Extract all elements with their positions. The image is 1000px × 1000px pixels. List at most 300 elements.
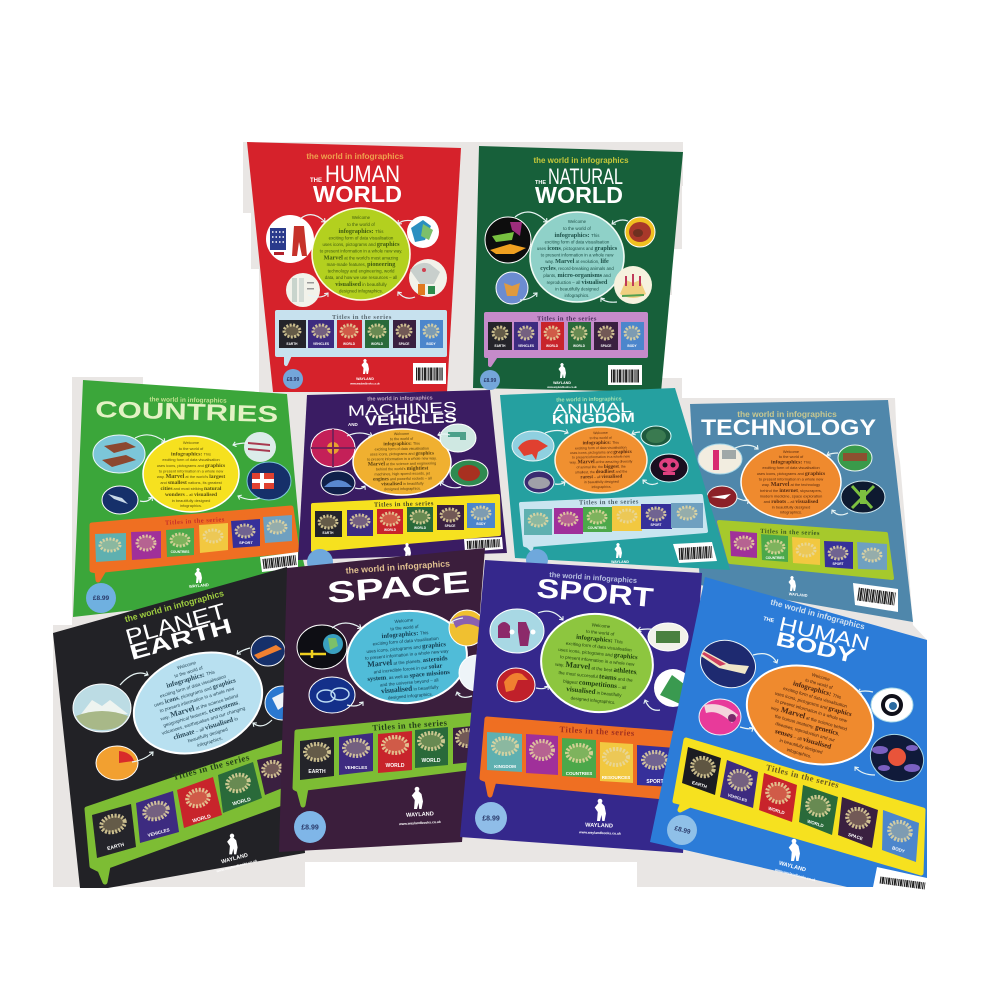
welcome text: to the world of [179, 446, 204, 451]
welcome text: infographics: This [339, 228, 383, 235]
welcome text: man-made features, pioneering [327, 261, 395, 268]
welcome text: to the world of [590, 436, 612, 440]
welcome text: uses icons, pictograms and graphics [774, 691, 852, 718]
series thumbnails: VEHICLES [345, 765, 367, 770]
series thumbnails: COUNTRIES [588, 526, 606, 530]
welcome text: Marvel at the science and engineering [368, 461, 436, 468]
title [123, 598, 235, 665]
publisher logo [189, 568, 209, 589]
welcome circle [312, 208, 410, 300]
welcome text: cycles, record-breaking animals and [540, 265, 614, 272]
title: THE [763, 616, 775, 624]
welcome text: in beautifully designed [584, 480, 619, 484]
series thumbnails: COUNTRIES [766, 556, 784, 560]
publisher logo [547, 363, 577, 389]
icon: city and chimney [409, 259, 447, 297]
welcome text: and the universe beyond – all [380, 677, 439, 687]
title: BODY [774, 628, 858, 668]
welcome text: to the world of [390, 624, 419, 631]
welcome text: uses icons, pictograms and graphics [558, 647, 638, 661]
book: The Natural World [473, 146, 683, 392]
price badge [475, 802, 507, 834]
barcode [853, 583, 898, 612]
welcome text: infographics. [180, 503, 202, 508]
welcome text: infographics. [786, 747, 812, 759]
series panel [92, 508, 297, 580]
publisher logo [788, 576, 808, 598]
icon: scales [641, 426, 671, 446]
icon: aircraft [707, 486, 737, 508]
icon: wheel [311, 429, 355, 467]
series thumbnails [92, 753, 285, 858]
icon: orange pie [96, 746, 138, 780]
welcome text: uses icons, pictograms and graphics [537, 245, 617, 252]
icon: skull [650, 454, 688, 482]
welcome text: visualised in beautifully [566, 685, 622, 698]
series thumbnails: WORLD [232, 797, 252, 807]
title: THE [310, 178, 322, 184]
icon: ocean scene [251, 636, 285, 666]
welcome text: cities and most striking natural [161, 486, 221, 492]
icon: buildings [286, 273, 320, 307]
publisher logo [404, 543, 411, 558]
price badge: £8.99 [482, 816, 500, 822]
icon: islands [102, 486, 138, 514]
welcome text: way. Marvel at the amazing diversity [570, 459, 632, 465]
welcome text: infographics: This [171, 452, 211, 458]
title [310, 161, 402, 207]
welcome text: diseases, reproduction and our [775, 721, 836, 743]
welcome text: Welcome [183, 440, 199, 445]
welcome text: geographical features, ecosystems, [163, 699, 240, 728]
icon: scoreboard [648, 623, 688, 651]
price badge [307, 549, 333, 575]
icon: planet layers [449, 610, 485, 646]
series thumbnails: WORLD [768, 806, 786, 816]
book: Planet Earth [53, 567, 305, 888]
series heading: Titles in the series [559, 724, 635, 738]
tagline: the world in infographics [306, 152, 404, 161]
title [552, 399, 635, 427]
series thumbnails: SPACE [601, 344, 611, 348]
icon: map [407, 216, 439, 248]
welcome text: modern medicine, space exploration [760, 494, 822, 498]
price badge: £8.99 [484, 378, 496, 384]
series thumbnails: VEHICLES [147, 827, 170, 838]
series thumbnails: BODY [627, 344, 637, 348]
welcome text: Welcome [811, 672, 831, 682]
title: SPORT [535, 573, 655, 613]
series thumbnails: WORLD [414, 526, 427, 530]
welcome text: way. Marvel at evolution, life [545, 258, 609, 265]
icon: pipe [440, 424, 476, 452]
book: Sport [460, 560, 702, 853]
series panel [313, 496, 499, 553]
welcome text: to present information in a whole new [159, 686, 235, 713]
welcome text: uses icons, pictograms and graphics [570, 450, 632, 455]
welcome text: infographics: This [583, 441, 619, 446]
series thumbnails: BODY [891, 845, 905, 854]
publisher logo: WAYLAND [553, 381, 571, 385]
icon: figure and grid [698, 444, 742, 474]
publisher logo: WAYLAND [778, 861, 806, 874]
series thumbnails [315, 503, 495, 537]
publisher logo: WAYLAND [585, 823, 613, 829]
publisher logo: www.waylandbooks.co.uk [350, 382, 380, 386]
series thumbnails: VEHICLES [518, 344, 534, 348]
series thumbnails: WORLD [422, 758, 441, 764]
icon: globe [265, 686, 299, 720]
series thumbnails [487, 732, 675, 787]
publisher logo [398, 787, 441, 826]
welcome text: rarest – all visualised [580, 475, 622, 480]
tagline: the world in infographics [556, 396, 622, 404]
icon: earth and orbit [297, 625, 347, 669]
icon: blood cell [864, 727, 930, 789]
welcome text: to the world of [586, 629, 615, 637]
arrows [536, 611, 660, 710]
welcome text: beautifully designed [187, 726, 229, 743]
title [348, 399, 457, 428]
welcome text: data, and how we use resources – all [325, 275, 397, 280]
welcome text: Welcome [176, 660, 197, 670]
series thumbnails: WORLD [192, 814, 212, 824]
arrows [735, 445, 848, 515]
welcome text: climate – all visualised in [172, 716, 239, 742]
series thumbnails: WORLD [384, 528, 397, 532]
welcome text: Welcome [591, 622, 611, 629]
cover [460, 560, 702, 853]
publisher logo: www.waylandbooks.co.uk [547, 386, 577, 389]
welcome text: to the world of [805, 677, 834, 690]
icon: hands [496, 272, 528, 304]
series thumbnails: WORLD [343, 342, 356, 346]
welcome text: engines and powerful rockets – all [373, 476, 432, 483]
welcome text: exciting form of data visualisation [159, 674, 227, 699]
cover [298, 390, 507, 560]
welcome text: way. Marvel at the best athletes, [555, 660, 638, 676]
series thumbnails: COUNTRIES [566, 771, 592, 776]
title: HUMAN [777, 613, 871, 656]
series thumbnails [95, 515, 292, 562]
tagline: the world in infographics [769, 598, 866, 632]
welcome text: visualised in beautifully [335, 281, 387, 288]
price badge: £8.99 [674, 825, 691, 836]
tagline: the world in infographics [549, 570, 637, 585]
welcome circle [535, 607, 659, 719]
welcome text: senses – all visualised [774, 727, 832, 751]
icon: muscle [694, 633, 762, 695]
price badge [480, 370, 500, 390]
welcome text: volcanoes, earthquakes and our changing [161, 705, 246, 736]
series panel [675, 740, 923, 873]
welcome text: and incredible forces in our solar [373, 662, 443, 674]
arrows [515, 212, 628, 302]
welcome text: Marvel at the planets, asteroids [367, 655, 448, 669]
welcome text: of animal life: the biggest, the [576, 465, 626, 470]
welcome text: uses icons, pictograms and graphics [322, 241, 400, 248]
welcome text: to the world of [390, 437, 414, 441]
welcome text: machines, high-speed records, jet [375, 472, 430, 476]
tagline: the world in infographics [345, 558, 450, 576]
welcome text: to the world of [779, 454, 804, 459]
price badge: £8.99 [301, 824, 319, 832]
book: The Human World [247, 142, 461, 392]
series heading: Titles in the series [537, 316, 597, 322]
welcome text: to present information in a whole new [775, 698, 848, 724]
welcome text: infographics: This [165, 669, 215, 690]
series thumbnails: SPACE [445, 524, 455, 528]
welcome text: infographics: This [576, 634, 623, 645]
series panel [482, 719, 680, 798]
series thumbnails: BODY [426, 342, 436, 346]
barcode [873, 867, 927, 887]
welcome text: and robots – all visualised [764, 499, 818, 505]
welcome circle [733, 649, 887, 781]
barcode [413, 363, 446, 384]
welcome text: to present information in a whole new [572, 454, 630, 460]
series panel [87, 740, 290, 882]
welcome text: way. Marvel at the technology [762, 482, 820, 488]
title: KINGDOM [552, 410, 635, 427]
title: MACHINES [348, 399, 457, 420]
welcome text: biggest competitions – all [563, 678, 627, 690]
welcome text: exciting form of data visualisation [545, 240, 610, 244]
price badge [86, 583, 116, 613]
welcome text: designed infographics. [384, 487, 421, 491]
icon: flag badge [247, 462, 291, 500]
welcome text: way. Marvel at the science behind [770, 705, 848, 732]
book: Animal Kingdom [500, 388, 730, 571]
tagline: the world in infographics [149, 396, 227, 405]
series panel [277, 312, 445, 364]
welcome text: in beautifully designed [172, 498, 210, 503]
barcode [673, 542, 717, 563]
welcome text: exciting form of data visualisation [565, 641, 632, 653]
publisher logo: WAYLAND [356, 377, 374, 381]
welcome text: uses icons, pictograms and graphics [153, 677, 237, 708]
welcome text: to present information in a whole new [541, 252, 614, 258]
book: The Human Body [650, 577, 930, 887]
series heading: Titles in the series [765, 762, 841, 790]
series thumbnails: COUNTRIES [171, 550, 189, 554]
icon: white planet [459, 655, 495, 691]
series thumbnails: WORLD [386, 763, 405, 769]
welcome text: designed infographics. [388, 691, 433, 700]
icon: cell [625, 217, 655, 247]
welcome text: infographics: This [383, 442, 420, 447]
title: AND [348, 422, 358, 427]
welcome text: Welcome [783, 449, 799, 454]
cover [690, 400, 913, 622]
series heading: Titles in the series [165, 516, 225, 527]
series thumbnails: SPACE [847, 832, 863, 841]
welcome text: uses icons, pictograms and graphics [757, 471, 825, 477]
welcome text: the human anatomy, genetics, [774, 713, 840, 737]
publisher logo [611, 543, 629, 564]
title: ANIMAL [553, 399, 632, 417]
cover [73, 380, 310, 617]
series panel [719, 522, 892, 578]
tagline: the world in infographics [737, 409, 837, 419]
arrows [332, 618, 472, 706]
cover [650, 577, 927, 887]
icon: players [490, 609, 544, 653]
series thumbnails: EARTH [691, 780, 708, 789]
publisher logo: www.waylandbooks.co.uk [774, 867, 816, 882]
arrows [135, 435, 260, 502]
welcome text: smallest, the deadliest and the [575, 470, 627, 475]
welcome text: to present information in a whole new way [365, 648, 449, 661]
icon: whale [524, 471, 554, 493]
publisher logo: WAYLAND [221, 853, 249, 865]
welcome text: to present information in a whole new [560, 654, 635, 667]
publisher logo [215, 834, 258, 874]
series thumbnails: BODY [476, 522, 486, 526]
title: TECHNOLOGY [701, 415, 876, 440]
icon: windmill [841, 481, 885, 513]
publisher logo [774, 839, 816, 882]
welcome circle [120, 635, 276, 771]
icon: galaxy [309, 677, 355, 713]
series thumbnails: SPACE [399, 342, 409, 346]
publisher logo: WAYLAND [189, 582, 209, 589]
series thumbnails: WORLD [573, 344, 586, 348]
welcome text: to the world of [347, 222, 376, 227]
tagline: the world in infographics [533, 156, 629, 165]
arrows [740, 654, 875, 775]
welcome text: infographics: This [771, 460, 811, 466]
welcome text: to present information in a whole new way. [320, 248, 402, 254]
price badge [283, 369, 303, 389]
welcome text: exciting form of data visualisation [372, 636, 439, 646]
series thumbnails [300, 725, 482, 780]
welcome circle [530, 212, 624, 302]
welcome text: Marvel at the world's most amazing [324, 254, 398, 262]
series thumbnails: EARTH [107, 842, 125, 852]
cover [500, 388, 730, 570]
publisher logo [350, 359, 380, 386]
series thumbnails: VEHICLES [727, 792, 748, 803]
icon: flower [614, 266, 652, 304]
welcome text: exciting form of data visualisation [162, 457, 220, 462]
barcode [608, 365, 642, 385]
series panel [521, 496, 706, 549]
welcome circle [343, 606, 471, 708]
icon: pink cell [699, 699, 741, 735]
welcome text: visualised in beautifully [381, 684, 439, 695]
series thumbnails [730, 531, 887, 570]
icon: pitch [654, 669, 692, 707]
icon: clothing and figure [266, 215, 314, 263]
welcome circle [741, 445, 841, 519]
book: Technology [690, 400, 913, 622]
cover [473, 146, 683, 392]
icon: animals [485, 217, 531, 263]
book: Space [279, 548, 495, 852]
title: VEHICLES [365, 409, 457, 428]
publisher logo: WAYLAND [406, 811, 434, 819]
welcome text: Welcome [593, 431, 608, 435]
cover [53, 567, 305, 888]
welcome text: in beautifully designed [555, 286, 599, 292]
icon: mountain [73, 684, 131, 732]
book: Countries [73, 380, 310, 617]
arrows [347, 433, 461, 489]
icon: flags stack [244, 432, 276, 462]
series thumbnails: SPORT [651, 523, 662, 527]
welcome text: behind the world's mightiest [376, 466, 428, 472]
welcome text: and smallest nations, its greatest [160, 480, 222, 486]
welcome text: to the world of [563, 226, 592, 231]
price badge [667, 815, 697, 845]
title: SPACE [326, 566, 471, 610]
welcome circle [143, 436, 239, 512]
welcome circle [555, 427, 647, 493]
welcome text: exciting form of data visualisation [375, 447, 429, 451]
cover [247, 142, 461, 392]
series thumbnails: VEHICLES [313, 342, 329, 346]
title [535, 164, 623, 208]
welcome text: Welcome [568, 219, 587, 224]
welcome text: technology and engineering, world [328, 268, 395, 274]
price badge: £8.99 [93, 595, 110, 602]
series thumbnails: SPORT [646, 779, 664, 785]
publisher logo [578, 799, 621, 836]
title: EARTH [127, 615, 235, 665]
welcome text: in beautifully designed [772, 504, 810, 510]
series thumbnails: WORLD [371, 342, 384, 346]
icon: teapot engine [450, 460, 488, 486]
series heading: Titles in the series [172, 752, 251, 782]
title: COUNTRIES [95, 396, 279, 427]
arrows [300, 215, 415, 298]
publisher logo: www.waylandbooks.co.uk [398, 820, 441, 826]
welcome text: way. Marvel at the world's largest [157, 474, 225, 480]
photo background surface [53, 142, 927, 887]
series thumbnails [488, 322, 644, 350]
series thumbnails: RESOURCES [602, 775, 630, 780]
title: WORLD [313, 181, 402, 207]
welcome text: way. Marvel at the science behind [160, 693, 239, 722]
series thumbnails: SPORT [239, 540, 253, 545]
book: Machines and Vehicles [298, 390, 507, 575]
welcome circle [353, 429, 451, 495]
publisher logo: WAYLAND [611, 560, 629, 564]
series thumbnails: EARTH [495, 344, 506, 348]
welcome text: the most successful teams and the [558, 670, 633, 683]
series panel [295, 714, 483, 805]
welcome text: uses icons, pictograms and graphics [366, 641, 446, 654]
welcome text: system, as well as space missions [367, 669, 450, 683]
welcome text: exciting form of data visualisation [762, 465, 820, 470]
welcome text: wonders – all visualised [165, 492, 217, 498]
welcome text: to the world of [174, 665, 204, 679]
series heading: Titles in the series [374, 500, 434, 509]
tagline: the world in infographics [124, 588, 225, 624]
welcome text: uses icons, pictograms and graphics [157, 463, 225, 469]
series thumbnails [524, 503, 703, 535]
title: NATURAL [548, 164, 623, 189]
welcome text: uses icons, pictograms and graphics [370, 451, 434, 457]
title: PLANET [123, 598, 229, 650]
welcome text: designed infographics. [570, 695, 616, 705]
welcome text: reproduction – all visualised [547, 279, 607, 286]
series heading: Titles in the series [579, 498, 639, 507]
icon: machine [838, 445, 872, 471]
series thumbnails: SPORT [833, 562, 844, 566]
welcome text: exciting form of data visualisation [329, 236, 394, 240]
